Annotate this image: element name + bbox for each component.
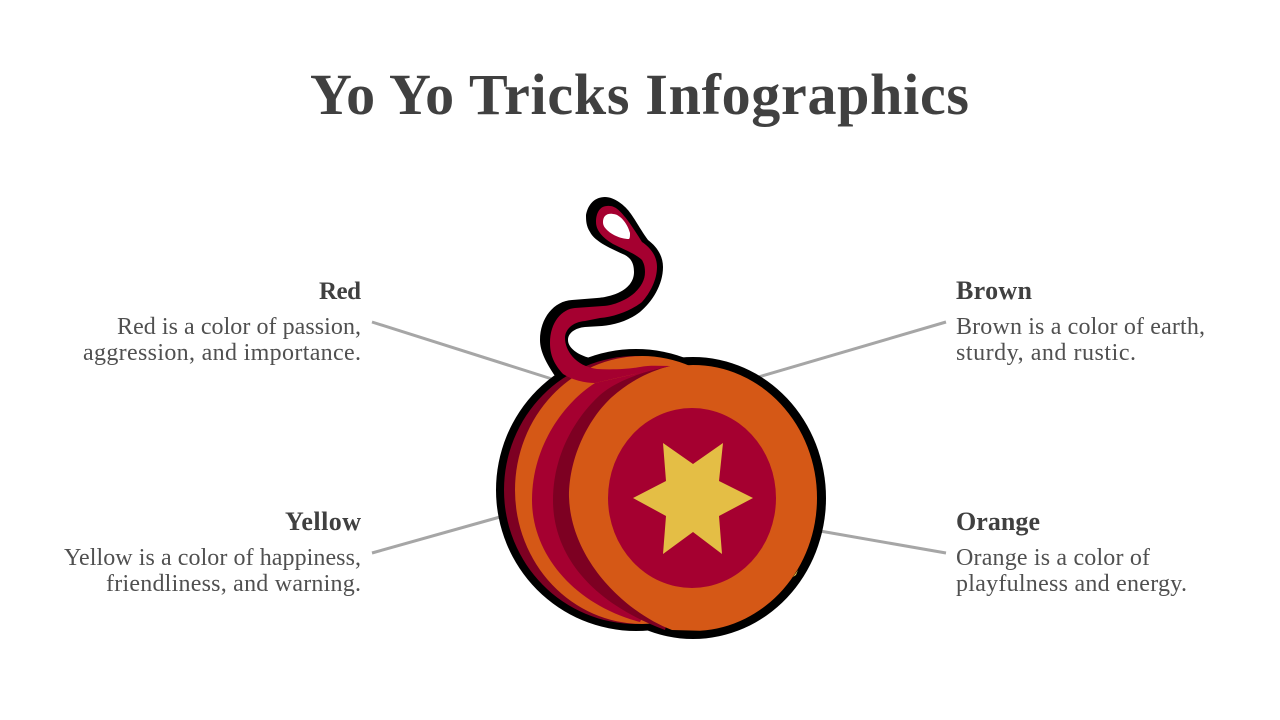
string and swoosh <box>550 206 670 383</box>
small yellow sliver <box>793 570 798 577</box>
yo-yo illustration <box>496 197 826 639</box>
star <box>633 443 753 554</box>
label: yellow: Yellow <box>285 507 361 536</box>
title: Yo Yo Tricks Infographics <box>310 62 969 127</box>
label: yellow: friendliness, and warning. <box>106 571 361 597</box>
label: yellow: Yellow is a color of happiness, <box>64 545 361 571</box>
label: orange: playfulness and energy. <box>956 571 1187 597</box>
label: red: Red <box>319 278 361 305</box>
label: brown: sturdy, and rustic. <box>956 340 1136 366</box>
connector line: yellow <box>372 517 500 553</box>
label: red: aggression, and importance. <box>83 340 361 366</box>
label: red: Red is a color of passion, <box>117 314 361 340</box>
label: red <box>83 278 361 366</box>
connector line: orange <box>820 531 946 553</box>
connector line: brown <box>755 322 946 378</box>
label: yellow <box>64 507 361 597</box>
inner red circle <box>608 408 776 588</box>
label: orange: Orange <box>956 507 1040 536</box>
back disc layers <box>504 356 769 630</box>
label: orange: Orange is a color of <box>956 545 1150 571</box>
label: brown: Brown <box>956 276 1033 305</box>
string outline <box>540 197 663 400</box>
label: brown: Brown is a color of earth, <box>956 314 1205 340</box>
yo-yo black outline <box>496 349 826 639</box>
connector line: red <box>372 322 552 379</box>
string loop hole <box>603 214 630 239</box>
label: brown <box>956 276 1205 366</box>
label: orange <box>956 507 1187 597</box>
front disc <box>569 365 817 631</box>
